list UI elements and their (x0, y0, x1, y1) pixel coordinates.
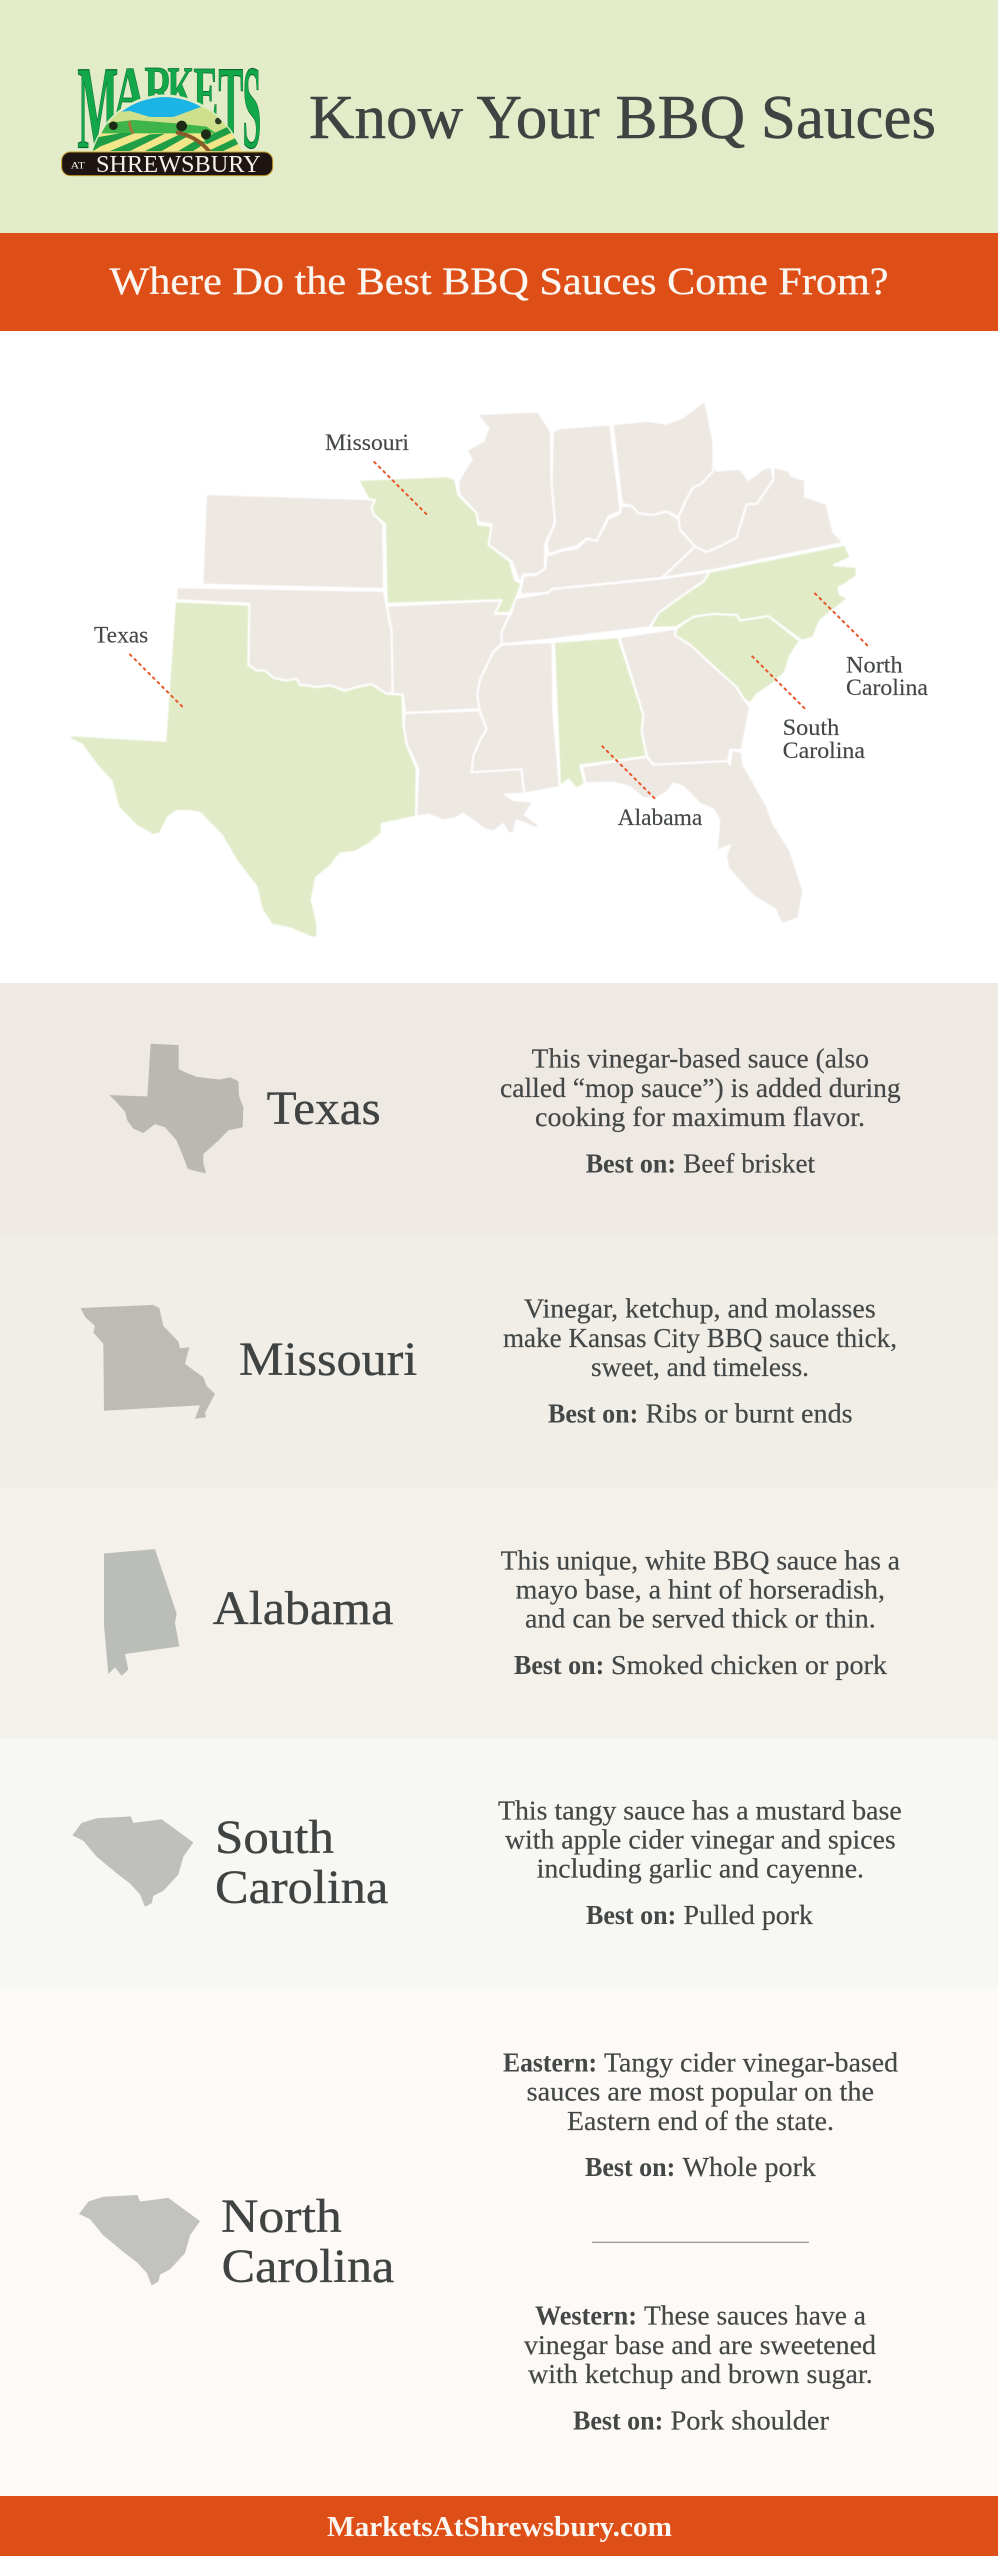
callout: South Carolina: South (783, 715, 840, 740)
panel: Alabama (0, 1487, 998, 1739)
panel: Texas (0, 983, 998, 1235)
description: Missouri: Best on: (548, 1398, 638, 1428)
description: Missouri: Ribs or burnt ends (646, 1398, 853, 1428)
icon: South Carolina silhouette (72, 1816, 193, 1907)
logo wordmark: S (243, 43, 261, 174)
description: Eastern style: Eastern: (503, 2047, 597, 2077)
description: South Carolina: Best on: (586, 1900, 676, 1930)
description: Eastern style: Best on: (585, 2152, 675, 2182)
footer website: MarketsAtShrewsbury.com (327, 2511, 672, 2543)
panel: South Carolina (0, 1739, 998, 1990)
description: Missouri (503, 1294, 897, 1428)
panel: Missouri (0, 1235, 998, 1487)
main title: Know Your BBQ Sauces (309, 84, 936, 152)
description: Western style: Western: (535, 2301, 637, 2331)
description: Alabama (501, 1545, 900, 1680)
heading: South Carolina: Carolina (215, 1861, 388, 1914)
logo wordmark: M (77, 44, 118, 174)
logo wordmark: T (218, 43, 243, 171)
subtitle band (0, 233, 998, 331)
logo name plate: SHREWSBURY (96, 151, 261, 178)
callout: South Carolina (752, 656, 865, 763)
callout: South Carolina: Carolina (783, 738, 865, 763)
description: Texas: Best on: (586, 1148, 676, 1178)
description: Eastern style: sauces are most popular on the (527, 2077, 874, 2107)
callout: Alabama: Alabama (618, 805, 702, 830)
callout: Texas (94, 623, 185, 709)
heading: North Carolina: Carolina (222, 2240, 394, 2293)
description: Missouri: Vinegar, ketchup, and molasses (524, 1294, 876, 1324)
callout: Alabama (602, 746, 702, 830)
heading: Texas: Texas (267, 1082, 381, 1135)
logo wordmark: E (193, 51, 218, 135)
map of the southeastern United States (70, 400, 928, 938)
icon: North Carolina silhouette (79, 2195, 200, 2285)
subtitle: Where Do the Best BBQ Sauces Come From? (110, 260, 888, 303)
logo wordmark: R (144, 54, 174, 126)
description: Alabama: Best on: (514, 1650, 604, 1680)
description: Alabama: Smoked chicken or pork (611, 1650, 888, 1680)
callout: North Carolina: Carolina (846, 675, 928, 700)
description: Western style: with ketchup and brown sugar. (528, 2359, 873, 2389)
description: Missouri: make Kansas City BBQ sauce thick, (503, 1323, 897, 1353)
heading: South Carolina (215, 1811, 388, 1914)
description: Western style: Pork shoulder (670, 2405, 829, 2435)
description: Eastern style (503, 2047, 898, 2182)
header band (0, 0, 998, 233)
description: Western style (524, 2301, 877, 2435)
logo wordmark: K (167, 55, 194, 127)
icon: Missouri silhouette (81, 1305, 215, 1419)
description: Western style: These sauces have a (644, 2301, 866, 2331)
logo farm landscape (90, 96, 247, 155)
description: Alabama: This unique, white BBQ sauce has a (501, 1545, 900, 1575)
description: Western style: vinegar base and are sweetened (524, 2330, 877, 2360)
description: Texas (500, 1044, 901, 1178)
description: Texas: called “mop sauce”) is added during (500, 1073, 901, 1103)
heading: North Carolina (221, 2190, 394, 2293)
description: Western style: Best on: (573, 2405, 663, 2435)
footer band (0, 2496, 998, 2556)
heading: South Carolina: South (215, 1811, 334, 1864)
description: Texas: This vinegar-based sauce (also (532, 1044, 869, 1074)
description: Alabama: mayo base, a hint of horseradish, (516, 1574, 885, 1604)
icon: Alabama silhouette (104, 1549, 179, 1676)
callout: North Carolina (815, 594, 928, 700)
description: Texas: Beef brisket (683, 1148, 816, 1178)
description: South Carolina: This tangy sauce has a mustard base (498, 1795, 902, 1825)
logo: Markets at Shrewsbury (61, 68, 274, 176)
description: South Carolina: Pulled pork (684, 1900, 814, 1930)
heading: Missouri: Missouri (239, 1333, 417, 1386)
heading: North Carolina: North (221, 2190, 342, 2243)
description: South Carolina: with apple cider vinegar and spices (505, 1824, 896, 1854)
description: South Carolina: including garlic and cayenne. (537, 1854, 864, 1884)
description: Eastern style: Eastern end of the state. (567, 2106, 834, 2136)
description: Missouri: sweet, and timeless. (591, 1352, 809, 1382)
panel: North Carolina (0, 1990, 998, 2496)
callout: Missouri: Missouri (325, 430, 409, 455)
heading: Alabama: Alabama (213, 1582, 393, 1635)
neutral states (176, 400, 843, 924)
description: South Carolina (498, 1795, 902, 1930)
logo wordmark (77, 43, 261, 174)
callout: Missouri (325, 430, 429, 517)
description: Eastern style: Whole pork (682, 2152, 817, 2182)
highlighted states (70, 476, 857, 938)
callout: North Carolina: North (846, 652, 903, 677)
description: Alabama: and can be served thick or thin. (525, 1604, 876, 1634)
description: Eastern style: Tangy cider vinegar-based (604, 2047, 898, 2077)
logo name plate: AT (71, 161, 85, 171)
description: Texas: cooking for maximum flavor. (535, 1102, 865, 1132)
logo wordmark: A (113, 52, 147, 135)
icon: Texas silhouette (109, 1044, 243, 1173)
callout: Texas: Texas (94, 623, 148, 648)
